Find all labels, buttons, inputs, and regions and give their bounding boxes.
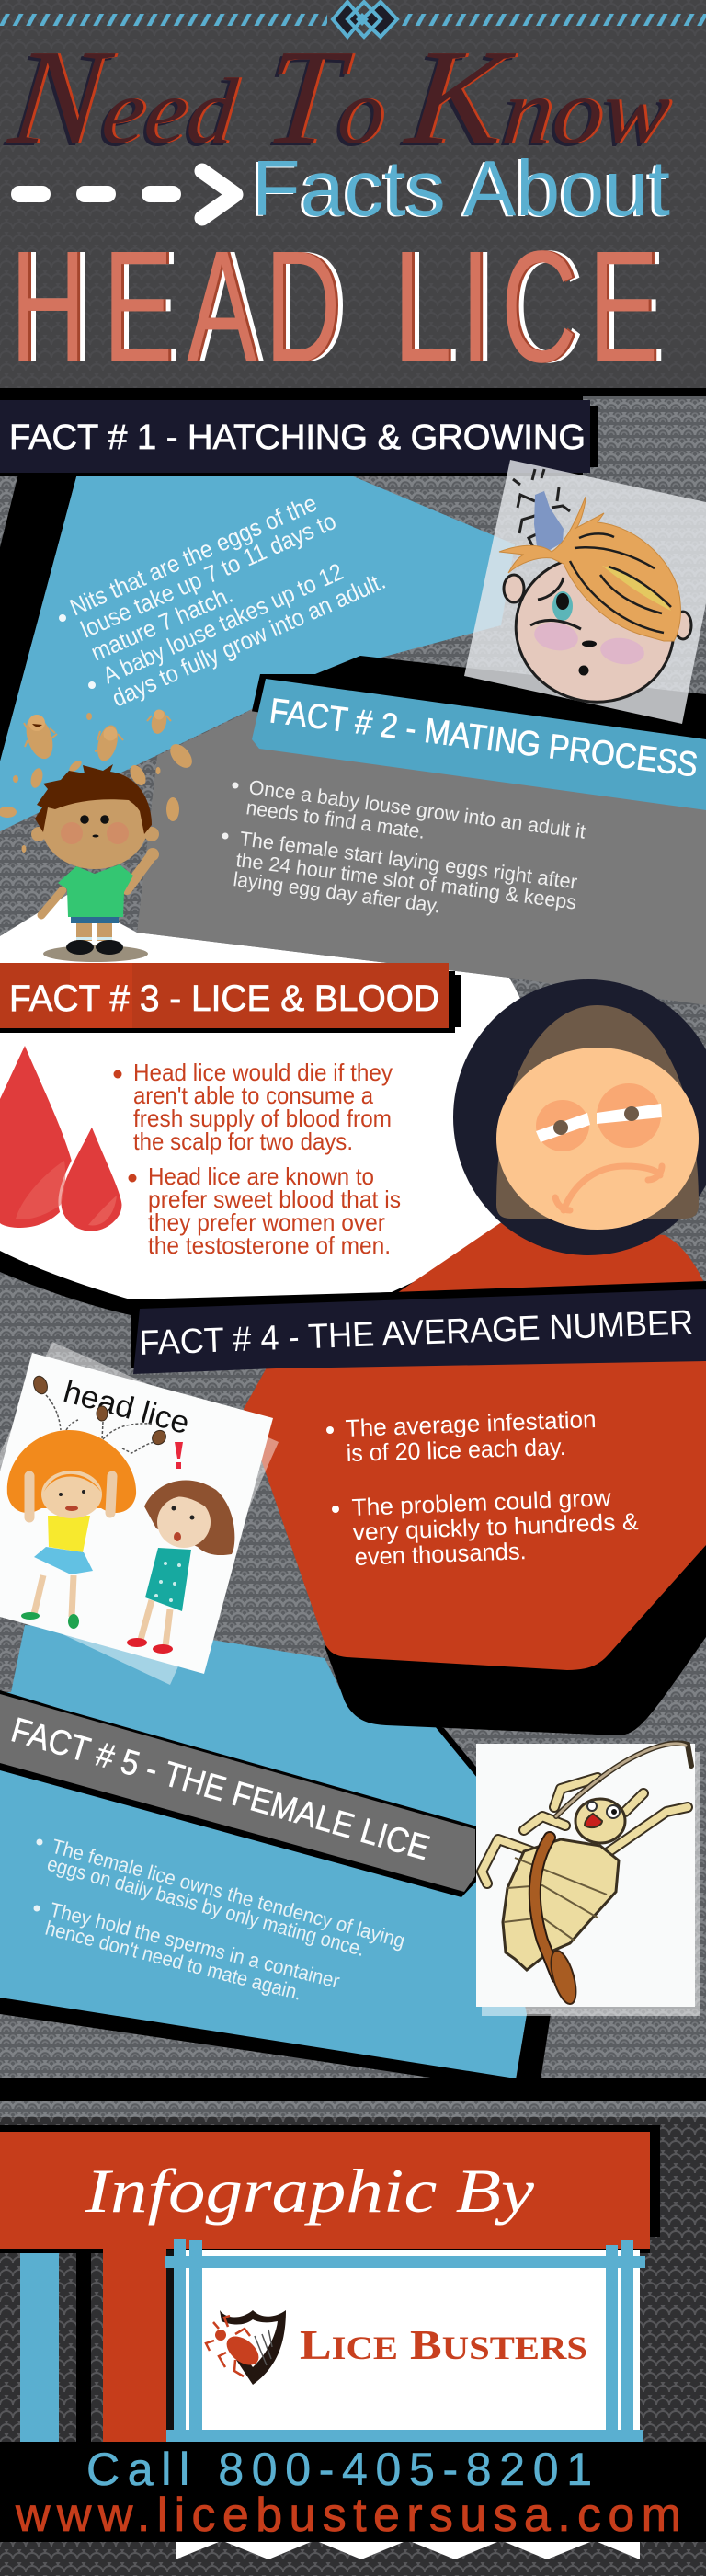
icon: blue louse on head — [513, 469, 570, 550]
title: HEAD LICE: H — [13, 218, 88, 396]
title: HEAD LICE: H — [10, 218, 85, 396]
black band under header — [0, 388, 706, 396]
fact 4 body text: The average infestation — [345, 1405, 597, 1442]
fact 5 body text: eggs on daily basis by only mating once. — [45, 1852, 368, 1961]
blue column — [20, 2253, 59, 2442]
black shadow of orange banner — [0, 2125, 660, 2442]
louse head — [575, 1799, 625, 1843]
exclamation mark — [175, 1442, 183, 1469]
header panel — [0, 0, 706, 396]
girl with brown hair — [127, 1481, 234, 1654]
fact 5 heading text: FACT # 5 - THE FEMALE LICE — [7, 1711, 434, 1868]
title: HEAD LICE: D — [272, 218, 347, 396]
fact 4 body text: The problem could grow — [351, 1483, 611, 1521]
panel: fact 5 blue shape — [0, 1625, 527, 2078]
fact 4 heading text: FACT # 4 - THE AVERAGE NUMBER — [139, 1303, 694, 1363]
fact 2 body text: the 24 hour time slot of mating & keeps — [234, 848, 578, 914]
grey text panel — [137, 711, 706, 1005]
icon: flying lice — [0, 709, 197, 853]
title: Need To Know: Need — [5, 22, 248, 173]
title: Need To Know: To — [258, 22, 393, 173]
title: Need To Know: To — [261, 22, 396, 173]
louse body — [503, 1839, 619, 1970]
fact 1 body text: louse take up 7 to 11 days to — [76, 507, 340, 643]
panel: fact 2 — [137, 656, 706, 1005]
fact 4 body text: is of 20 lice each day. — [346, 1433, 566, 1467]
fact 2 heading banner — [252, 679, 706, 810]
panel: fact 5 picture of female louse — [476, 1744, 700, 2016]
louse legs — [482, 1778, 688, 1883]
fact 3 body text: the scalp for two days. — [133, 1128, 353, 1155]
hair strand — [535, 1744, 691, 1977]
fact 3 body text: the testosterone of men. — [148, 1231, 391, 1259]
contact band — [0, 2442, 706, 2542]
fact 2 body text: needs to find a mate. — [245, 796, 427, 843]
decorative rope divider with diamonds — [0, 2, 706, 38]
fact 1 heading banner — [0, 396, 598, 476]
logo text: Lice Busters: LICE BUSTERS — [300, 2321, 587, 2368]
title: HEAD LICE: D — [265, 218, 340, 396]
orange banner — [0, 2132, 650, 2249]
fact 2 body text — [222, 775, 586, 918]
website: www.licebustersusa.com — [15, 2489, 681, 2542]
fact 5 body text: The female lice owns the tendency of laying — [50, 1835, 407, 1952]
heading: Infographic By: Infographic By — [85, 2156, 535, 2226]
title: HEAD LICE: C — [504, 218, 579, 396]
title: Need To Know: Need — [0, 25, 243, 176]
fact 5 banner shadow — [0, 1690, 477, 1897]
title: Need To Know — [0, 22, 681, 176]
fact 2 body text: The female start laying eggs right after — [238, 827, 578, 894]
panel: fact 5 black shadow — [0, 1998, 516, 2078]
title: Facts About: Facts About — [252, 145, 670, 233]
fact 2 body text: Once a baby louse grow into an adult it — [247, 775, 586, 843]
panel: fact 4 — [131, 1281, 706, 1735]
title: HEAD LICE: E — [591, 218, 661, 396]
title: HEAD LICE: H — [17, 218, 93, 396]
fact 1 body text: mature 7 hatch. — [86, 580, 237, 666]
icon: small brown lice — [31, 1374, 169, 1448]
fact 4 body text — [326, 1405, 639, 1571]
fact 4 body text: very quickly to hundreds & — [352, 1507, 639, 1546]
title: HEAD LICE: E — [103, 218, 173, 396]
fact 1 heading text: FACT # 1 - HATCHING & GROWING — [9, 418, 586, 457]
panel: fact 1 background — [0, 474, 515, 831]
title: HEAD LICE: I — [463, 218, 493, 396]
title: HEAD LICE: A — [187, 218, 256, 396]
icon: sad woman with head scarf — [392, 979, 706, 1297]
title: HEAD LICE: E — [596, 218, 666, 396]
fact 2 body text: laying egg day after day. — [232, 867, 442, 918]
title: HEAD LICE: A — [189, 218, 259, 396]
orange column — [103, 2244, 166, 2442]
girl with orange hair — [7, 1430, 136, 1629]
icon: boy with lice — [31, 764, 159, 962]
nose and mouth — [582, 640, 597, 647]
hair streaks — [570, 533, 671, 633]
title: Need To Know: Need — [2, 22, 245, 173]
fact 3 body text: Head lice are known to — [148, 1162, 374, 1190]
decorative zigzag — [176, 2542, 640, 2559]
hair highlight — [602, 566, 671, 611]
title: HEAD LICE: L — [396, 218, 455, 396]
fact 4 body text: even thousands. — [354, 1537, 527, 1571]
fact 4 heading banner — [133, 1289, 706, 1374]
title: HEAD LICE: L — [393, 218, 452, 396]
title: HEAD LICE: I — [468, 218, 497, 396]
title: HEAD LICE — [10, 218, 666, 396]
face — [505, 544, 685, 715]
cheeks — [532, 619, 580, 654]
black backing shape — [246, 656, 706, 750]
title: Need To Know: Know — [396, 25, 676, 176]
title: Need To Know: Know — [402, 22, 681, 173]
hair club end — [546, 1948, 581, 2007]
title: HEAD LICE: A — [194, 218, 264, 396]
picture label: head lice: head lice — [60, 1374, 193, 1441]
fact 3 body text: they prefer women over — [148, 1208, 385, 1236]
fact 5 heading banner — [0, 1694, 475, 1892]
fact 3 body text — [114, 1059, 401, 1259]
fact 4 banner backing — [131, 1281, 706, 1368]
lice jump trails — [46, 1395, 154, 1453]
fact 3 body text: prefer sweet blood that is — [148, 1185, 401, 1213]
fact 3 heading banner — [0, 963, 461, 1033]
panel: fact 5 blue background — [432, 1726, 479, 1789]
title: Facts About: Facts About — [249, 146, 667, 234]
fact 3 body text: fresh supply of blood from — [133, 1105, 392, 1132]
hair — [499, 497, 680, 641]
title: Need To Know: To — [256, 25, 391, 176]
title: HEAD LICE: L — [401, 218, 460, 396]
fact 3 body text: Head lice would die if they — [133, 1059, 393, 1086]
panel: white backdrop of fact 3 — [0, 895, 551, 1315]
title: HEAD LICE: C — [508, 218, 584, 396]
panel: fact 5 — [0, 1690, 477, 2005]
black shadow of orange panel — [325, 1545, 706, 1735]
fact 1 body text: Nits that are the eggs of the — [65, 488, 321, 621]
title: HEAD LICE: E — [106, 218, 176, 396]
ears — [504, 575, 524, 602]
fact 3 body text: aren't able to consume a — [133, 1082, 373, 1109]
black band above footer — [0, 2078, 706, 2101]
eye and eyebrows — [552, 591, 573, 621]
icon: blood drops — [0, 1046, 123, 1232]
logo: shield with louse — [206, 2310, 286, 2385]
fact 3 heading text: FACT # 3 - LICE & BLOOD — [9, 979, 439, 1019]
fact 5 body text: They hold the sperms in a container — [48, 1898, 342, 1993]
orange panel — [244, 1352, 706, 1670]
fact 1 body text: days to fully grow into an adult. — [108, 567, 390, 712]
fact 5 body text: hence don't need to mate again. — [43, 1917, 304, 2005]
title: HEAD LICE: E — [110, 218, 180, 396]
title: Need To Know: Know — [399, 22, 678, 173]
sign board — [165, 2239, 645, 2442]
arrow: dashed white arrow — [11, 171, 235, 218]
title: HEAD LICE: D — [268, 218, 343, 396]
panel: footer — [0, 2101, 706, 2576]
fact 1 body text: A baby louse takes up to 12 — [98, 557, 347, 689]
phone number: Call 800-405-8201 — [86, 2444, 592, 2495]
fact 1 body text — [59, 488, 390, 712]
black strip beside fact 5 panel — [516, 2014, 551, 2080]
title: HEAD LICE: C — [501, 218, 576, 396]
fact 5 body text — [33, 1835, 407, 2005]
title: HEAD LICE: I — [461, 218, 490, 396]
title: HEAD LICE: E — [588, 218, 658, 396]
panel: fact 4 picture of girls with head lice — [0, 1342, 279, 1685]
panel: fact 1 portrait of worried child — [464, 460, 706, 724]
